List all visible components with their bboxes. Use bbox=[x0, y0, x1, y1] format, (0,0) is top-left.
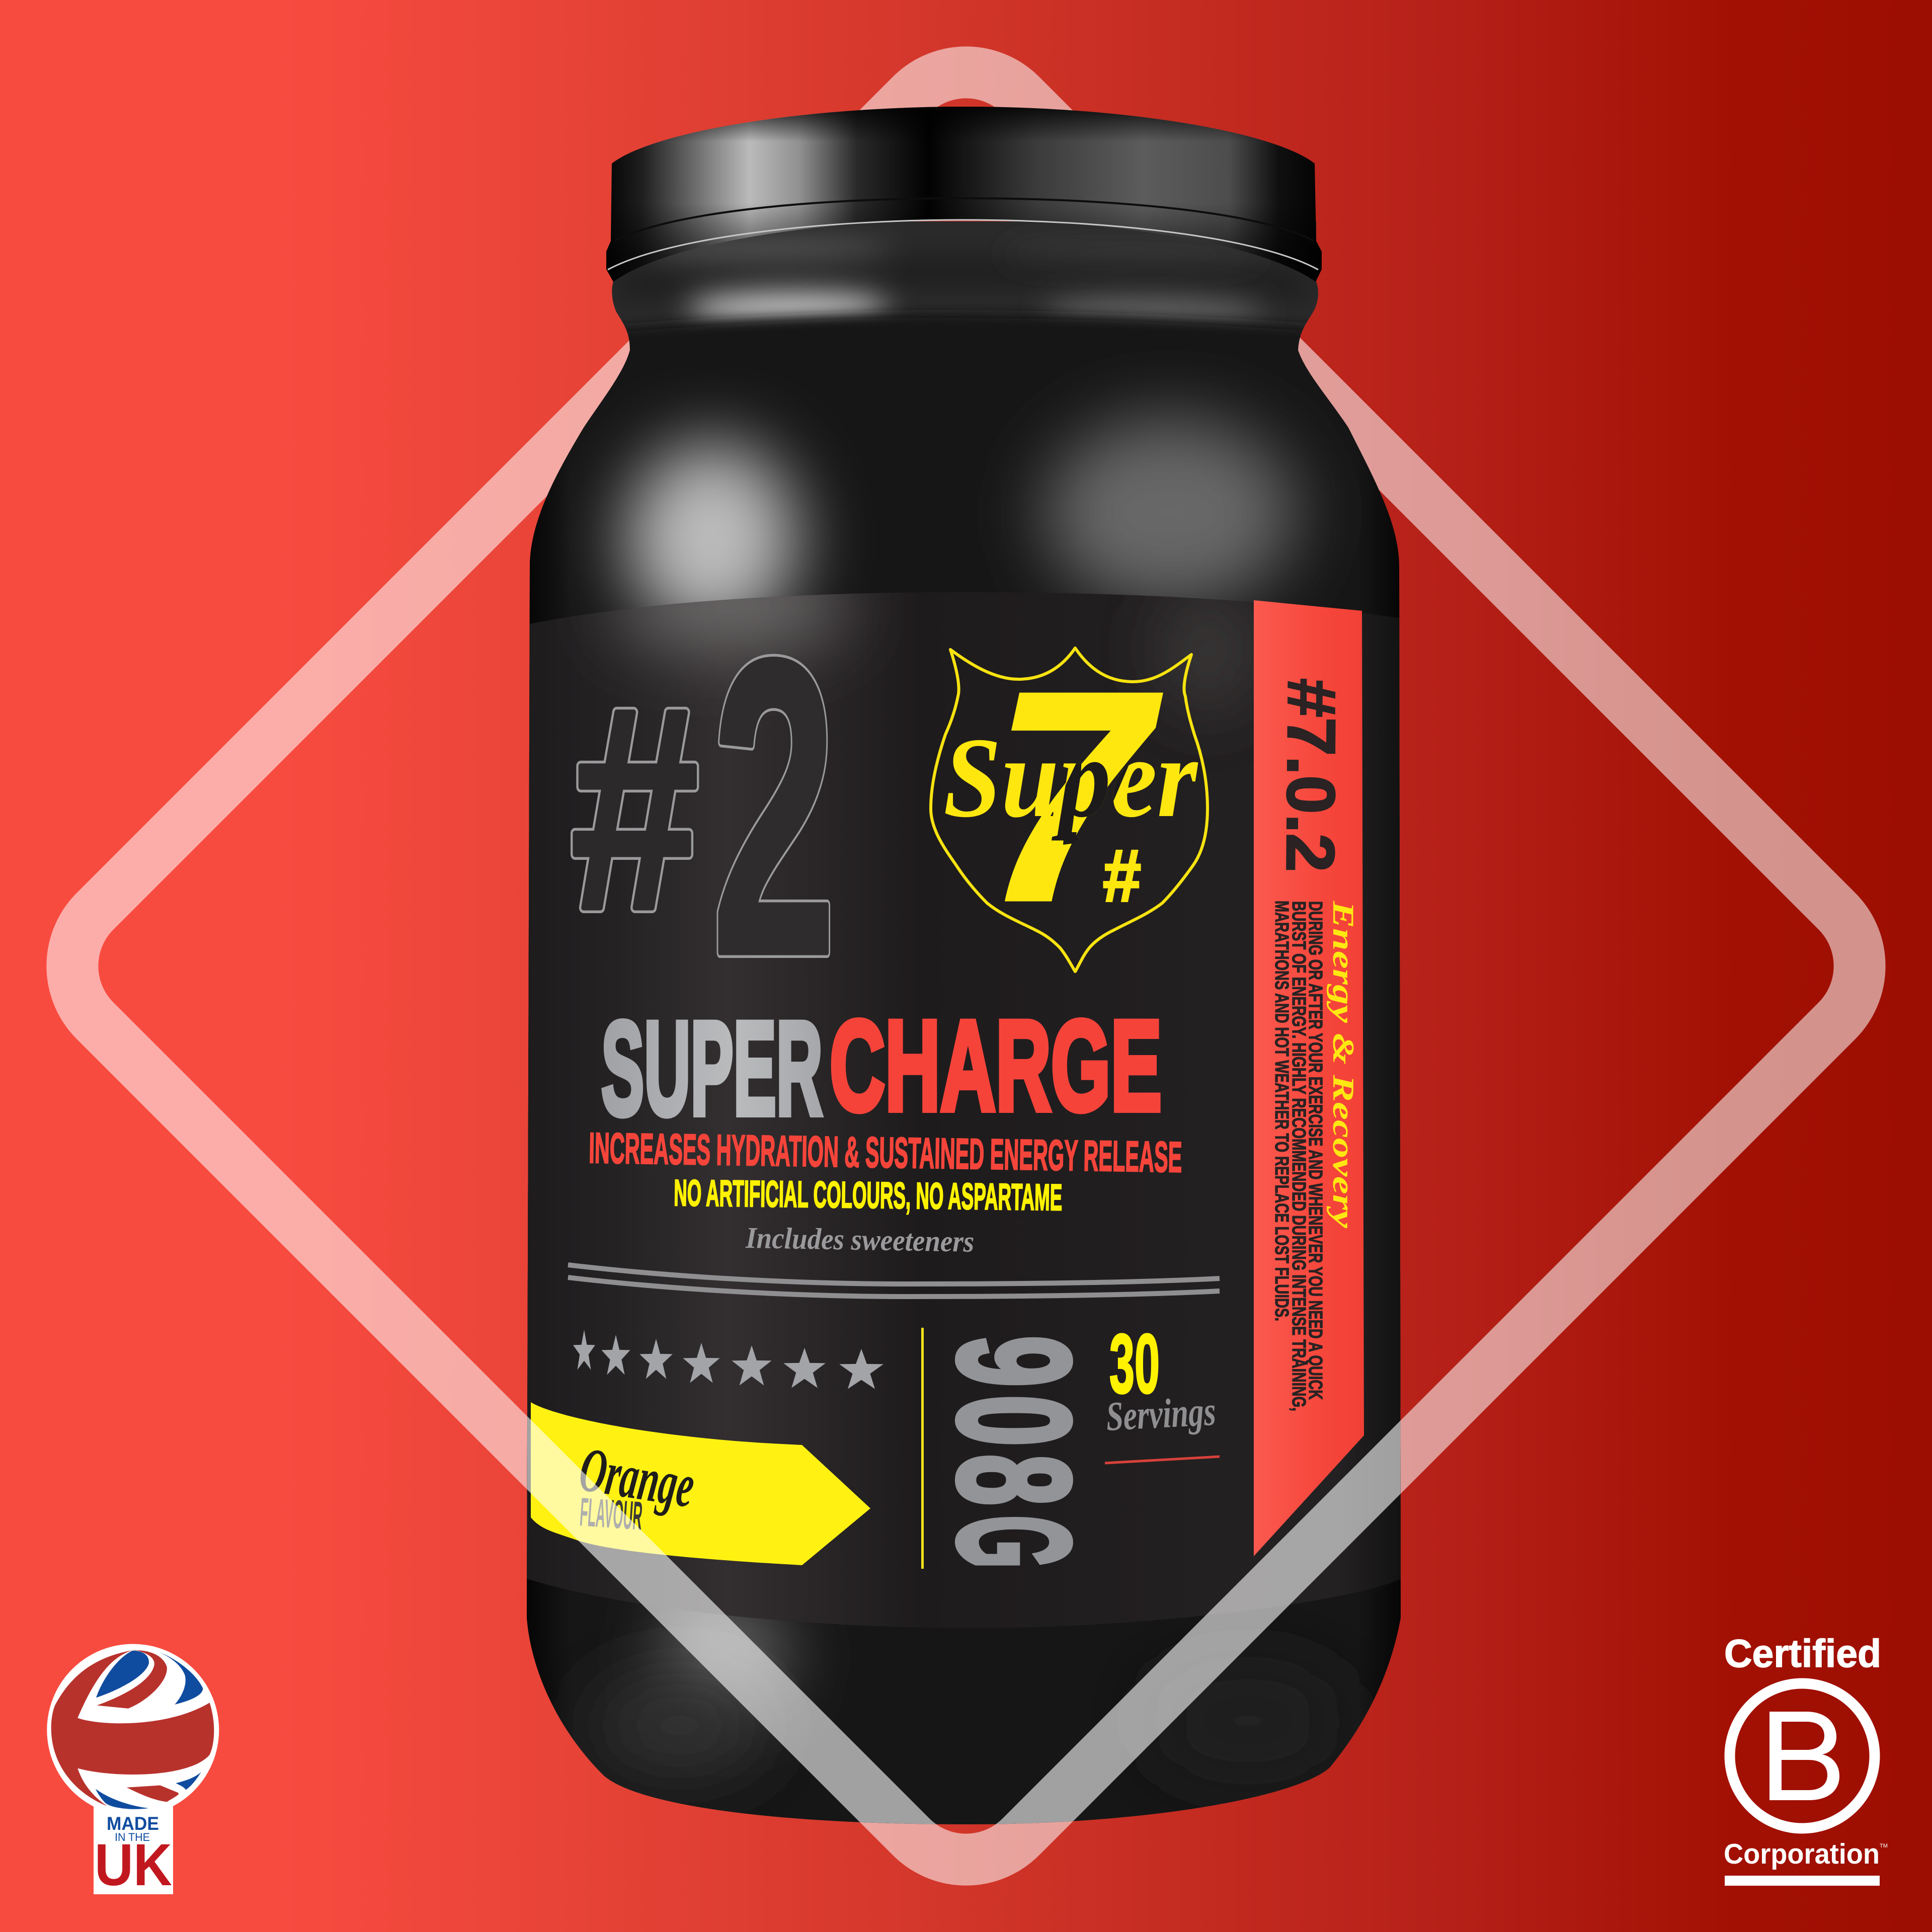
servings word: Servings bbox=[1105, 1388, 1217, 1439]
badge tag bbox=[94, 1804, 173, 1894]
outline number #2: 2 bbox=[712, 573, 836, 1041]
flavour name: Orange bbox=[575, 1434, 699, 1521]
outline number #2: # bbox=[571, 648, 698, 969]
vertical yellow divider bbox=[921, 1328, 924, 1569]
jar lid bbox=[606, 107, 1322, 282]
flavour flag bbox=[531, 1402, 870, 1565]
inverted script word inside 7: Super bbox=[943, 714, 1198, 841]
badge: Made in the UK bbox=[47, 1644, 219, 1898]
outline number #2: # bbox=[571, 648, 698, 969]
product jar: INCREASES HYDRATION & SUSTAINED ENERGY RELEASE bbox=[589, 1124, 1182, 1182]
badge wording: MADE bbox=[107, 1813, 159, 1834]
numeral 7: 7 bbox=[951, 631, 1187, 962]
product jar bbox=[527, 107, 1880, 1833]
servings count: 30 bbox=[1109, 1317, 1160, 1411]
exclamation dot detail bbox=[1063, 832, 1077, 845]
label panel bbox=[527, 558, 1401, 1628]
seven star rating row bbox=[573, 1330, 883, 1389]
Certified word: Certified bbox=[1724, 1631, 1881, 1675]
underline bar bbox=[1725, 1876, 1880, 1886]
product jar: NO ARTIFICIAL COLOURS, NO ASPARTAME bbox=[674, 1172, 1063, 1218]
double divider lines bbox=[568, 1265, 1220, 1297]
outline number #2: 2 bbox=[712, 573, 836, 1041]
script word Super: Super bbox=[943, 714, 1198, 841]
strip script heading: Energy & Recovery bbox=[1327, 901, 1360, 1228]
outline number #2 bbox=[571, 573, 836, 1041]
strip description: BURST OF ENERGY. HIGHLY RECOMMENDED DURING INTENSE TRAINING, bbox=[1288, 901, 1309, 1411]
strip description: MARATHONS AND HOT WEATHER TO REPLACE LOST FLUIDS. bbox=[1271, 901, 1292, 1321]
red side strip bbox=[1254, 600, 1364, 1556]
red rule bbox=[1105, 1457, 1220, 1463]
Corporation word: Corporation bbox=[1724, 1838, 1880, 1870]
net weight 908G: 908 bbox=[926, 1336, 1103, 1514]
product name SUPERCHARGE: SUPER bbox=[601, 994, 823, 1143]
product name SUPERCHARGE: CHARGE bbox=[830, 994, 1162, 1138]
strip description: DURING OR AFTER YOUR EXERCISE AND WHENEVER YOU NEED A QUICK bbox=[1305, 901, 1326, 1400]
batch number: #7.0.2 bbox=[1272, 678, 1350, 872]
sweeteners note: Includes sweeteners bbox=[745, 1221, 975, 1258]
net weight 908G: G bbox=[925, 1515, 1102, 1568]
strip description bbox=[1271, 901, 1326, 1411]
jar body bbox=[503, 221, 1434, 1862]
badge wording: UK bbox=[95, 1832, 172, 1898]
flavour flag: FLAVOUR bbox=[579, 1489, 644, 1539]
globe flag bbox=[47, 1644, 219, 1816]
B in circle bbox=[1730, 1683, 1875, 1828]
trademark: TM bbox=[1880, 1843, 1888, 1849]
badge wording: IN THE bbox=[115, 1831, 150, 1843]
Super7 shield logo bbox=[931, 631, 1208, 972]
badge: Certified B Corporation bbox=[1724, 1631, 1888, 1886]
hash mark: # bbox=[1103, 835, 1141, 917]
